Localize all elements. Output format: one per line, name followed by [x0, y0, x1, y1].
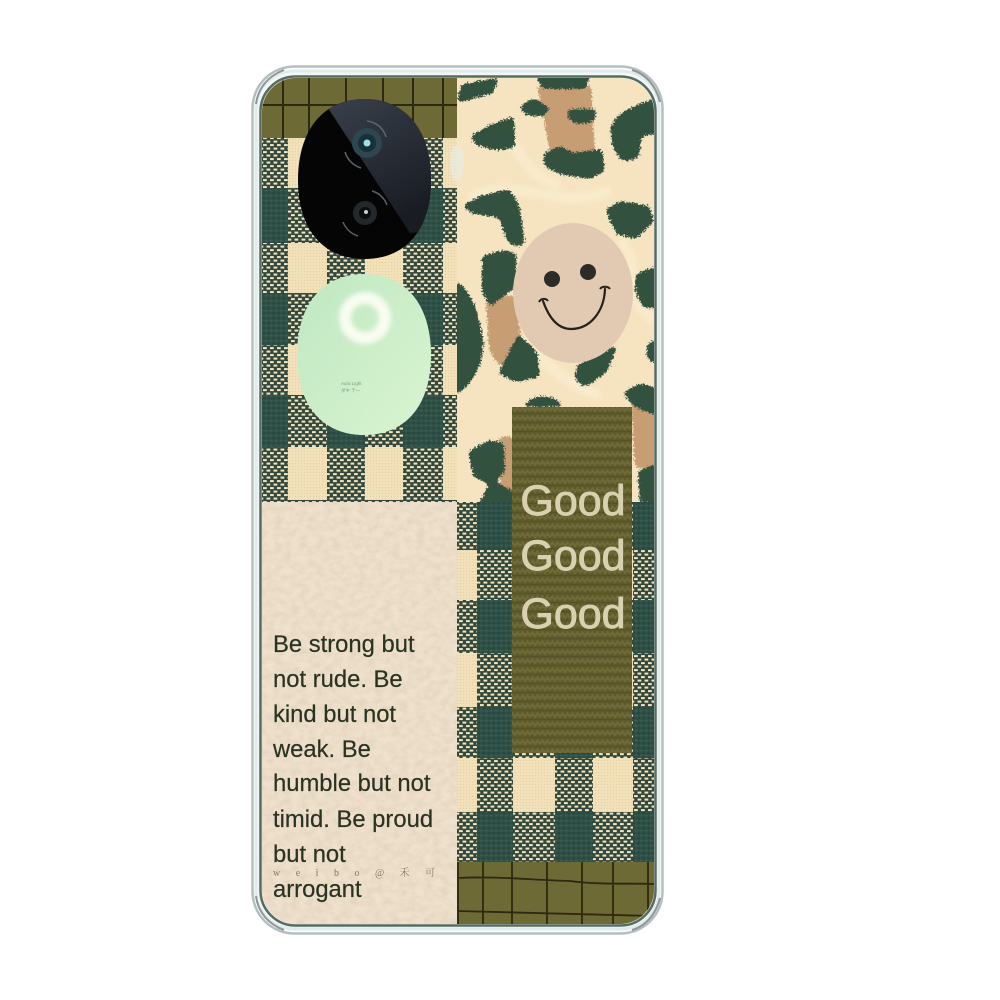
clear case glint [450, 145, 464, 181]
text: Good Good Good [522, 484, 624, 629]
dark leopard spots [454, 74, 660, 508]
quote text: timid. Be proud [273, 806, 433, 833]
flash ring [345, 298, 385, 338]
tiny module text: Aura Light [341, 381, 362, 386]
case back artwork [262, 74, 660, 924]
quote text: not rude. Be [273, 666, 403, 693]
panel: cable knit [262, 502, 457, 924]
quote text: but not [273, 841, 346, 868]
quote text: Be strong but [273, 631, 415, 658]
camera module [298, 99, 431, 259]
panel: olive grid top left [262, 78, 457, 138]
quote text: humble but not [273, 770, 431, 797]
camera glass highlight [328, 99, 431, 233]
panel: knit Good label [512, 407, 632, 753]
mint flash module: ダキ テー [341, 387, 361, 394]
lens: upper [345, 121, 386, 168]
lens: lower [343, 191, 387, 236]
clear case shell [252, 66, 662, 934]
text: Good Good Good: Good [520, 532, 626, 580]
panel: leopard fur [454, 74, 660, 508]
smiley face [513, 223, 633, 363]
panel: olive grid bottom right [457, 862, 654, 924]
brown leopard spots [485, 84, 660, 496]
panel: gingham left [262, 138, 457, 502]
quote text: weak. Be [272, 736, 371, 763]
text: Good Good Good: Good [520, 590, 626, 638]
quote text [272, 631, 433, 903]
panel: gingham right [457, 502, 654, 862]
quote text: arrogant [273, 876, 362, 903]
mint flash module [297, 274, 431, 435]
quote text: kind but not [273, 701, 396, 728]
text: Good Good Good: Good [520, 477, 626, 525]
watermark text: weibo@禾可 [273, 867, 451, 879]
phone case product image [251, 65, 664, 935]
case corner bumpers [256, 70, 660, 930]
